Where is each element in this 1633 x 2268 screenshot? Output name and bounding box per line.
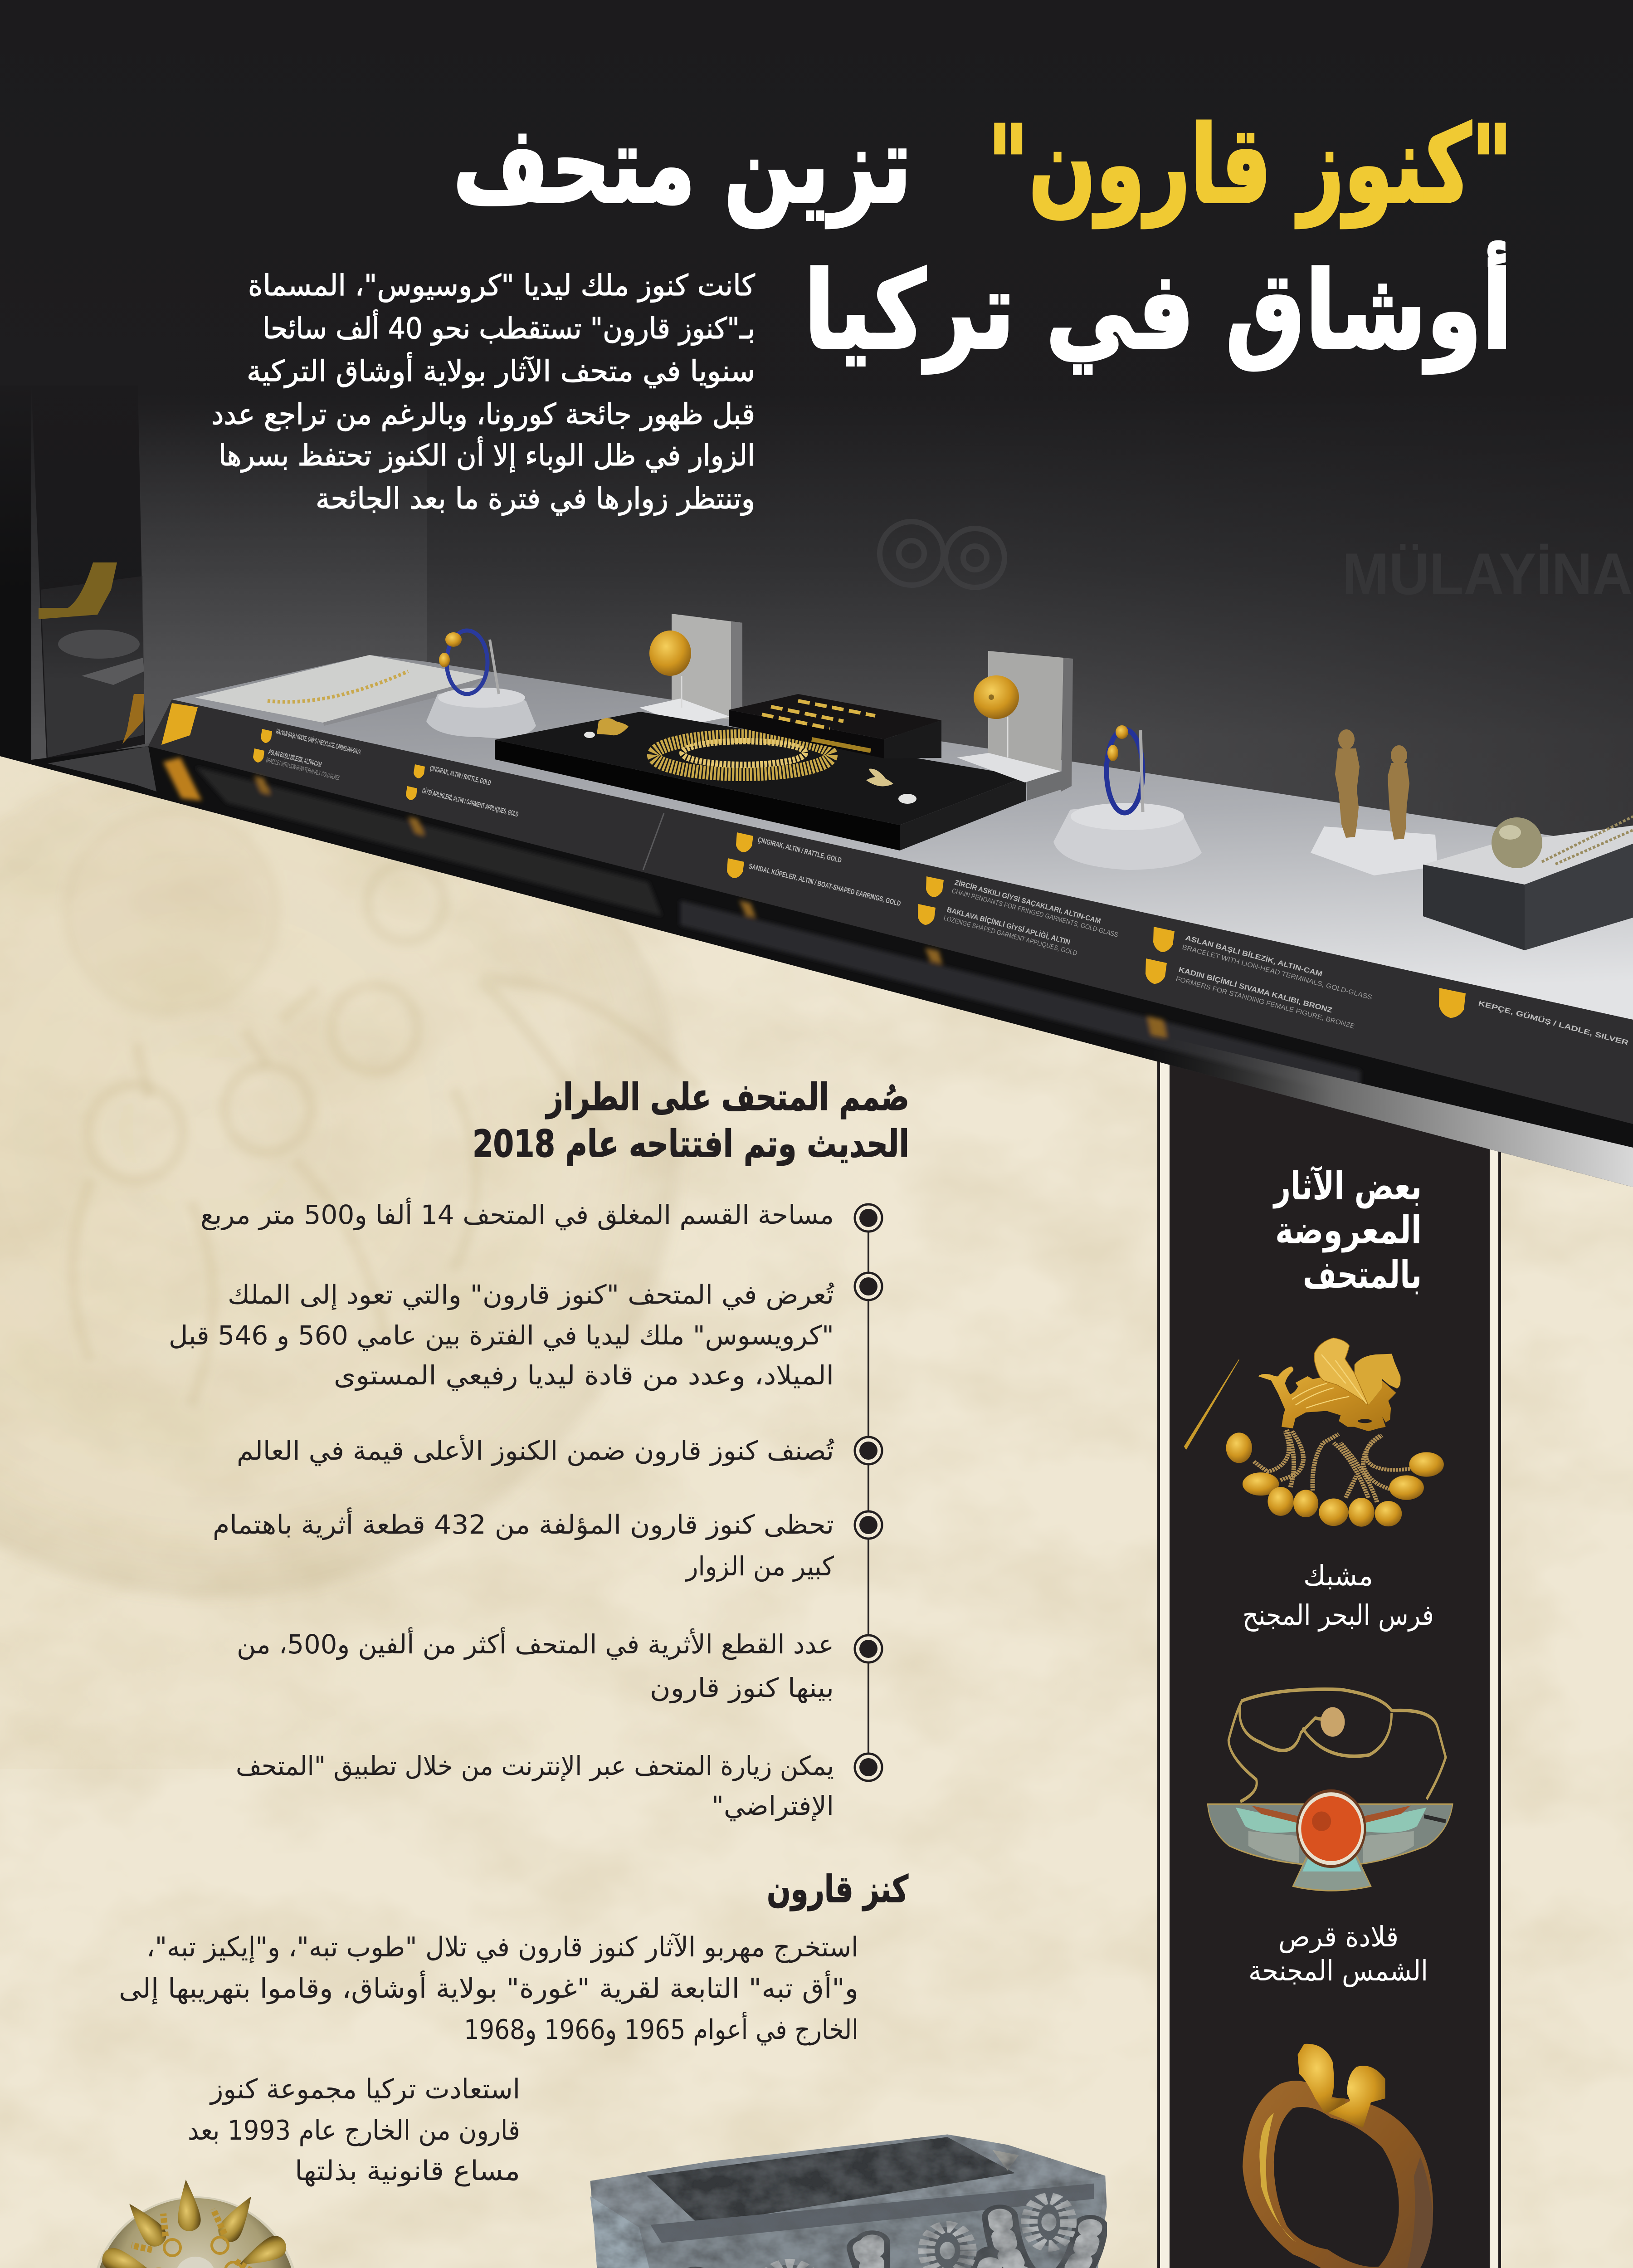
heading: museum: الحديث وتم افتتاحه عام 2018	[473, 1123, 909, 1166]
caption: brooch: فرس البحر المجنح	[1243, 1598, 1434, 1632]
caption: necklace	[1248, 1920, 1428, 1987]
strip labels: ASLAN BAŞLI BİLEZİK, ALTIN-CAM	[268, 748, 322, 769]
bullet 4	[855, 1511, 882, 1539]
caption: brooch: مشبك	[1303, 1559, 1373, 1592]
list item 2	[169, 1279, 834, 1391]
strip labels: GİYSİ APLİKLERİ, ALTIN / GARMENT APPLIQUES, GOLD	[421, 787, 519, 819]
list item 1: مساحة القسم المغلق في المتحف 14 ألفا و500 متر مربع	[200, 1198, 834, 1231]
strip labels: ÇINGIRAK, ALTIN / RATTLE, GOLD	[429, 764, 492, 787]
list item 2: تُعرض في المتحف "كنوز قارون" والتي تعود إلى الملك	[228, 1279, 834, 1310]
intro text block: سنويا في متحف الآثار بولاية أوشاق التركية	[247, 352, 755, 388]
bracelet on stand, right	[1053, 725, 1202, 870]
strip labels: LOZENGE SHAPED GARMENT APPLIQUES, GOLD	[943, 914, 1078, 958]
artifact: lion head bracelet	[1243, 2044, 1433, 2268]
intro text block: قبل ظهور جائحة كورونا، وبالرغم من تراجع عدد	[211, 398, 755, 431]
strip labels: HAYVAN BAŞLI KOLYE, ONİKS / NECKLACE, CARNELIAN-ONYX	[275, 727, 362, 756]
strip labels	[253, 727, 1630, 1047]
list item 6: الإفتراضي"	[712, 1790, 834, 1822]
watermark: treasure disc relief	[0, 744, 717, 1660]
artifact: stone sarcophagus	[575, 2135, 1107, 2268]
label strip	[148, 699, 1633, 1124]
list item 4: كبير من الزوار	[685, 1551, 834, 1582]
list item 2: "كرويسوس" ملك ليديا في الفترة بين عامي 560 و 546 قبل	[169, 1320, 834, 1351]
heading: museum: صُمم المتحف على الطراز	[545, 1076, 909, 1119]
paragraph: smuggling	[119, 1931, 858, 2046]
list item 3: تُصنف كنوز قارون ضمن الكنوز الأعلى قيمة في العالم	[237, 1434, 834, 1466]
heading: museum	[473, 1076, 909, 1166]
strip labels: KADIN BİÇİMLİ SIVAMA KALIBI, BRONZ	[1178, 965, 1333, 1015]
sarcophagus body	[590, 2135, 1107, 2268]
title: أوشاق في تركيا	[804, 241, 1512, 374]
strip labels: BRACELET WITH LION-HEAD TERMINALS, GOLD-GLASS	[265, 756, 340, 782]
strip labels: FORMERS FOR STANDING FEMALE FIGURE, BRONZE	[1175, 975, 1355, 1030]
title: تزين متحف	[453, 103, 912, 228]
bracelet on stand, left	[426, 631, 536, 738]
panel heading: بالمتحف	[1303, 1252, 1422, 1297]
reflective ledge	[0, 746, 1633, 1188]
caption: necklace: الشمس المجنحة	[1248, 1954, 1428, 1987]
intro text block: بـ"كنوز قارون" تستقطب نحو 40 ألف سائحا	[263, 309, 755, 346]
carved garlands	[688, 2217, 1090, 2268]
paragraph: recovery: استعادت تركيا مجموعة كنوز	[209, 2073, 520, 2105]
left side wall of the case	[141, 502, 427, 717]
timeline	[855, 1204, 882, 1781]
title	[453, 103, 1512, 374]
list item 5: بينها كنوز قارون	[650, 1672, 834, 1704]
list item 6: يمكن زيارة المتحف عبر الإنترنت من خلال تطبيق "المتحف	[236, 1750, 834, 1782]
paragraph: smuggling: استخرج مهربو الآثار كنوز قارون في تلال "طوب تبه"، و"إيكيز تبه"،	[146, 1931, 858, 1963]
paragraph: recovery: قارون من الخارج عام 1993 بعد	[188, 2115, 520, 2146]
intro text block: كانت كنوز ملك ليديا "كروسيوس"، المسماة	[248, 269, 756, 303]
list item 5	[237, 1627, 834, 1704]
intro text block: وتنتظر زوارها في فترة ما بعد الجائحة	[316, 482, 755, 516]
two figurines	[1335, 729, 1409, 840]
strip labels: BRACELET WITH LION-HEAD TERMINALS, GOLD-GLASS	[1181, 943, 1373, 1002]
black pedestal with gold necklace	[495, 712, 1026, 850]
panel: artifacts column	[1170, 998, 1490, 2268]
black box with gold appliques	[729, 694, 941, 758]
caption: brooch	[1243, 1559, 1434, 1632]
panel heading: المعروضة	[1275, 1208, 1422, 1253]
photo: museum display case	[0, 0, 1633, 1188]
artifact: winged sun necklace	[1208, 1689, 1453, 1891]
paper with necklace	[195, 655, 487, 726]
acrylic block with gold disc, left	[639, 614, 742, 726]
strip labels: SANDAL KÜPELER, ALTIN / BOAT-SHAPED EARRINGS, GOLD	[748, 861, 902, 908]
bullet 5	[855, 1635, 882, 1662]
bullet 6	[855, 1754, 882, 1781]
bullet 1	[855, 1204, 882, 1232]
faint wall ornament	[880, 522, 1004, 587]
figurine stand	[1311, 826, 1438, 875]
display table top	[172, 655, 1633, 1020]
intro text block	[211, 269, 756, 516]
artifact: winged seahorse brooch	[1185, 1338, 1444, 1527]
list item 4: تحظى كنوز قارون المؤلفة من 432 قطعة أثرية باهتمام	[213, 1507, 834, 1540]
list item 2: الميلاد، وعدد من قادة ليديا رفيعي المستوى	[334, 1360, 834, 1391]
bullet 2	[855, 1273, 882, 1300]
acrylic block with gold disc, right	[957, 651, 1073, 801]
panel heading	[1272, 1164, 1422, 1297]
intro text block: الزوار في ظل الوباء إلا أن الكنوز تحتفظ بسرها	[219, 436, 755, 473]
panel outline: artifacts column frame	[1159, 998, 1500, 2268]
strip labels: ZİRCİR ASKILI GİYSİ SAÇAKLARI, ALTIN-CAM	[954, 878, 1102, 925]
artifact: gold and silver bowl	[92, 2179, 299, 2268]
left glass pane with reflections	[0, 386, 145, 816]
strip labels: ÇINGIRAK, ALTIN / RATTLE, GOLD	[757, 836, 843, 865]
panel heading: بعض الآثار	[1272, 1164, 1422, 1209]
list item 6	[236, 1750, 834, 1822]
heading: Croesus treasure: كنز قارون	[767, 1868, 908, 1911]
strip labels: KEPÇE, GÜMÜŞ / LADLE, SILVER	[1477, 999, 1630, 1047]
list item 4	[213, 1507, 834, 1582]
box with silver sphere	[1423, 816, 1633, 950]
bullet 3	[855, 1437, 882, 1464]
yellow tab	[161, 703, 198, 745]
list item 5: عدد القطع الأثرية في المتحف أكثر من ألفين و500، من	[237, 1627, 834, 1660]
strip labels: ASLAN BAŞLI BİLEZİK, ALTIN-CAM	[1185, 934, 1323, 978]
strip labels: CHAIN PENDANTS FOR FRINGED GARMENTS, GOLD-GLASS	[951, 887, 1119, 939]
strip labels: BAKLAVA BİÇİMLİ GİYSİ APLİĞİ, ALTIN	[946, 905, 1071, 947]
paragraph: smuggling: و"أق تبه" التابعة لقرية "غورة" بولاية أوشاق، وقاموا بتهريبها إلى	[119, 1970, 858, 2004]
caption: necklace: قلادة قرص	[1278, 1920, 1399, 1953]
paragraph: recovery	[188, 2073, 520, 2187]
paragraph: recovery: مساع قانونية بذلتها	[295, 2155, 520, 2187]
paragraph: smuggling: الخارج في أعوام 1965 و1966 و1968	[464, 2012, 858, 2046]
